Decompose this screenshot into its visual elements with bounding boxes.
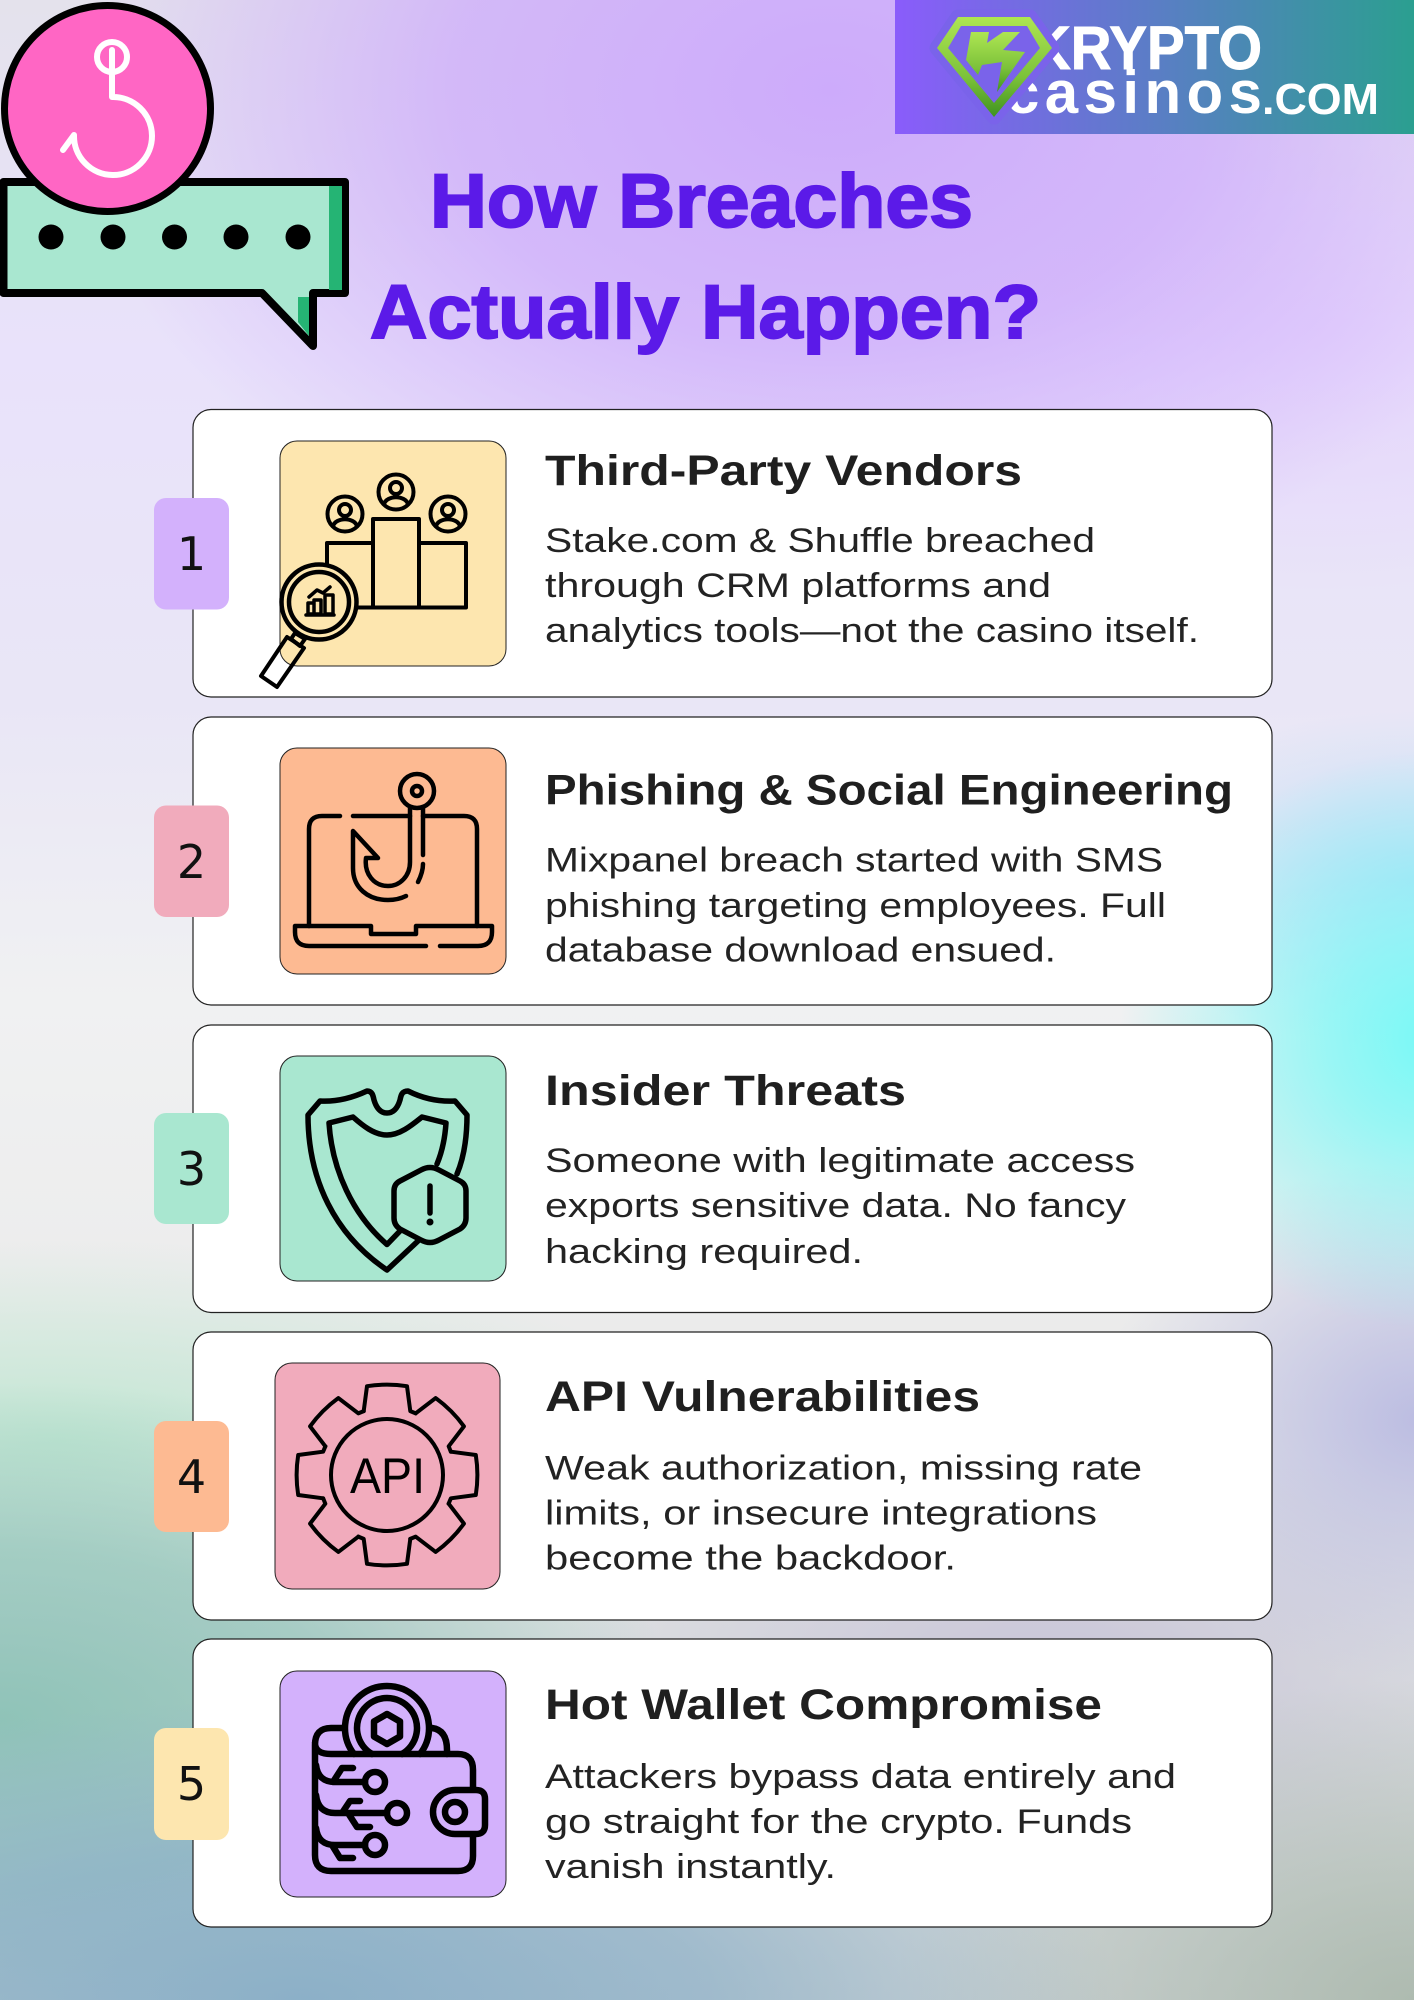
panel: API vulnerabilities [154, 1332, 1272, 1620]
number badge 5: 5 [177, 1757, 206, 1811]
icon: podium with magnifier [261, 441, 506, 687]
description: go straight for the crypto. Funds [545, 1803, 1132, 1841]
title [370, 159, 1041, 355]
description [545, 1142, 1135, 1271]
logo wordmark casinos: casinos [1006, 59, 1262, 126]
heading: Phishing & Social Engineering [545, 766, 1233, 814]
icon: API gear [275, 1363, 500, 1589]
icon: shield with warning [280, 1056, 506, 1281]
heading: Third-Party Vendors [545, 447, 1022, 495]
number badge 2: 2 [177, 835, 206, 889]
icon: API gear: API [350, 1448, 425, 1504]
description: hacking required. [545, 1233, 863, 1271]
heading: Hot Wallet Compromise [545, 1681, 1102, 1729]
description: exports sensitive data. No fancy [545, 1187, 1126, 1225]
description: Someone with legitimate access [545, 1142, 1135, 1180]
logo wordmark .COM: .COM [1262, 75, 1379, 124]
number badge 4 [154, 1421, 229, 1532]
title: Actually Happen? [370, 270, 1041, 355]
description [545, 842, 1166, 970]
panel: phishing and social engineering [154, 717, 1272, 1005]
logo banner [895, 0, 1414, 134]
description: Weak authorization, missing rate [545, 1450, 1142, 1488]
icon: laptop with fish hook [280, 748, 506, 974]
description: database download ensued. [545, 932, 1056, 970]
logo wordmark KRYPTO: KRYPTO [1030, 14, 1262, 82]
number badge 2 [154, 806, 229, 917]
description: analytics tools—not the casino itself. [545, 612, 1199, 650]
number badge 1 [154, 498, 229, 610]
heading: API Vulnerabilities [545, 1373, 980, 1421]
number badge 5 [154, 1728, 229, 1840]
icon: pink circle with fish hook [4, 6, 210, 212]
description: phishing targeting employees. Full [545, 887, 1166, 925]
description: become the backdoor. [545, 1540, 956, 1578]
number badge 1: 1 [177, 527, 206, 581]
description [545, 1450, 1142, 1578]
description: limits, or insecure integrations [545, 1494, 1097, 1532]
logo diamond [937, 17, 1052, 117]
description: Mixpanel breach started with SMS [545, 842, 1163, 880]
description: Attackers bypass data entirely and [545, 1758, 1176, 1796]
speech bubble with dots [4, 182, 345, 346]
heading: Insider Threats [545, 1067, 906, 1115]
panel: third-party vendors [154, 410, 1272, 697]
description: vanish instantly. [545, 1848, 836, 1886]
icon: crypto wallet [280, 1671, 506, 1897]
number badge 3 [154, 1113, 229, 1224]
description: Stake.com & Shuffle breached [545, 522, 1095, 560]
panel: hot wallet compromise [154, 1639, 1272, 1927]
description: through CRM platforms and [545, 567, 1051, 605]
panel: insider threats [154, 1025, 1272, 1312]
description [545, 522, 1199, 650]
number badge 3: 3 [177, 1142, 206, 1196]
description [545, 1758, 1176, 1886]
title: How Breaches [430, 159, 973, 244]
number badge 4: 4 [177, 1450, 206, 1504]
